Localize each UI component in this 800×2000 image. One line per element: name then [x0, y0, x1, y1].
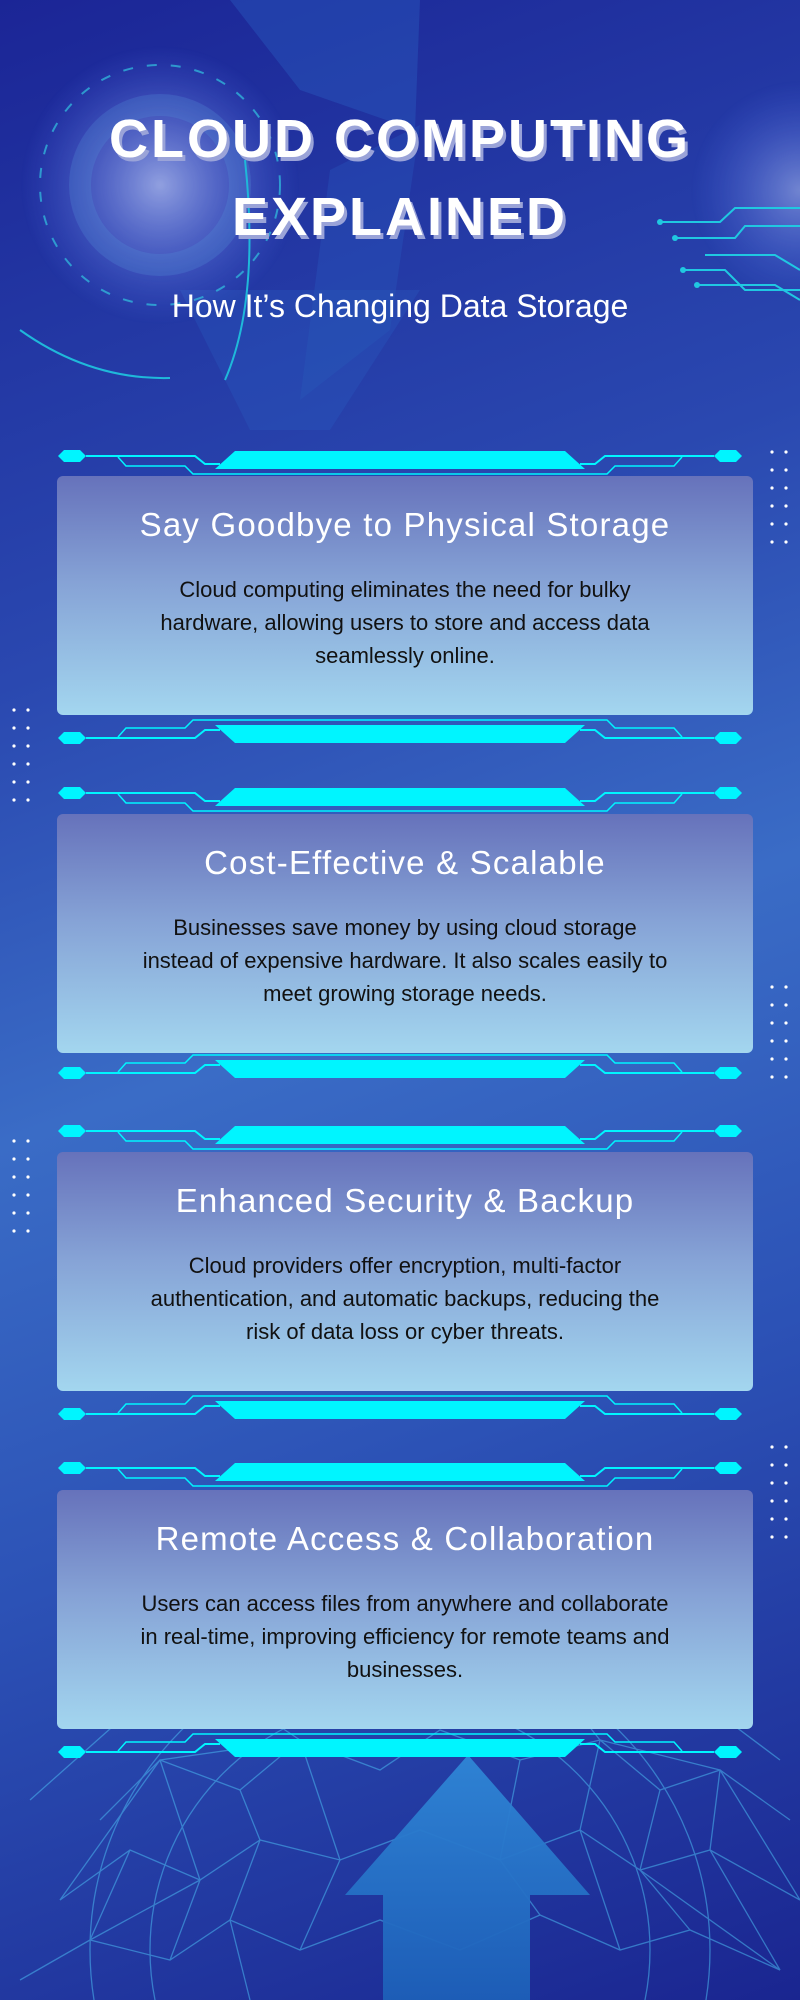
title: [109, 109, 691, 247]
title: EXPLAINED: [232, 187, 568, 247]
dots: [770, 450, 788, 544]
text block: Cloud providers offer encryption, multi-factor authentication, and automatic backups, reducing the risk of data loss or cyber threats.: [151, 1253, 659, 1344]
panel: cost-effective: [57, 814, 753, 1053]
text block: Businesses save money by using cloud storage instead of expensive hardware. It also scales easily to meet growing storage needs.: [143, 915, 667, 1006]
heading: Cost-Effective & Scalable: [204, 844, 606, 881]
bars: [58, 450, 742, 474]
decoration: network globe bottom: [20, 1640, 800, 2000]
heading: Enhanced Security & Backup: [176, 1182, 634, 1219]
arrow: [345, 1755, 590, 2000]
panel: remote access: [57, 1490, 753, 1729]
text block: Cloud computing eliminates the need for bulky hardware, allowing users to store and access data seamlessly online.: [160, 577, 650, 668]
text block: Users can access files from anywhere and collaborate in real-time, improving efficiency for remote teams and businesses.: [140, 1591, 670, 1682]
decoration: radial burst top left: [20, 0, 800, 430]
title: CLOUD COMPUTING: [109, 109, 691, 169]
panel: security: [57, 1152, 753, 1391]
heading: Say Goodbye to Physical Storage: [140, 506, 670, 543]
panel: physical storage: [57, 476, 753, 715]
heading: Remote Access & Collaboration: [156, 1520, 654, 1557]
subtitle: How It’s Changing Data Storage: [172, 288, 628, 324]
